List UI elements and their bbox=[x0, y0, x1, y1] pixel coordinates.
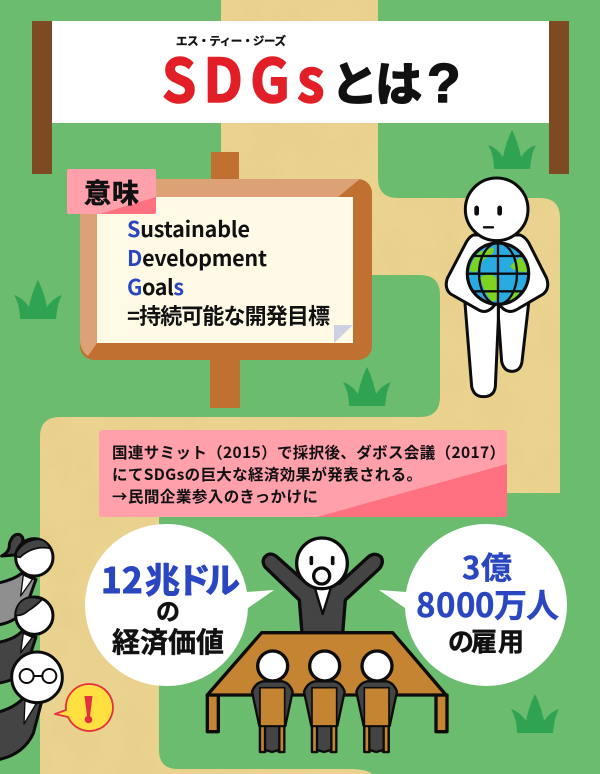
glasses man head bbox=[12, 652, 62, 703]
glasses right lens bbox=[42, 669, 56, 683]
line: Sustainable: Sustainable bbox=[127, 213, 250, 244]
tag text: 意味 bbox=[84, 172, 139, 211]
speech bubble: 12 trillion dollars bbox=[85, 524, 274, 686]
sign board dark frame bbox=[80, 179, 372, 360]
eye right bbox=[327, 558, 338, 563]
value line 2: 8000万人 bbox=[416, 579, 559, 627]
sign text bbox=[127, 213, 330, 331]
man head bbox=[15, 597, 53, 634]
の雇用 text: の雇用 bbox=[448, 622, 524, 659]
exclamation bar bbox=[84, 696, 92, 716]
tag darker corner bbox=[100, 197, 156, 214]
value line 1: 3億 bbox=[462, 543, 512, 588]
man body bbox=[0, 632, 36, 683]
icon: grass tuft top right bbox=[488, 130, 536, 169]
chair leg right bbox=[384, 726, 389, 752]
経済価値 text: 経済価値 bbox=[112, 621, 224, 661]
glasses bridge bbox=[34, 673, 42, 679]
mouth bbox=[484, 224, 493, 231]
woman body bbox=[0, 573, 36, 625]
chair legs and trousers bbox=[364, 726, 389, 752]
head circle bbox=[12, 652, 62, 703]
equator bbox=[468, 270, 528, 277]
bubble shape bbox=[85, 524, 274, 686]
banner cloth bbox=[52, 21, 549, 123]
callout line 3: →民間企業参入のきっかけに bbox=[112, 485, 318, 507]
meridian ellipse bbox=[479, 243, 517, 304]
woman head bbox=[16, 539, 53, 576]
icon: grass tuft centre bbox=[343, 367, 391, 406]
speaker body with raised arms bbox=[263, 554, 382, 633]
hair bbox=[15, 597, 42, 615]
glasses man shirt bbox=[24, 700, 36, 724]
chair back bbox=[312, 688, 337, 726]
woman shirt bbox=[21, 575, 32, 596]
woman ponytail bbox=[2, 534, 23, 556]
eye left bbox=[306, 558, 317, 563]
title: question mark: ? bbox=[427, 52, 461, 114]
note paper folded corner bbox=[334, 325, 353, 343]
torso bbox=[304, 681, 345, 726]
sign post top bbox=[211, 152, 239, 180]
south parallel bbox=[473, 288, 523, 295]
callout darker corner bbox=[317, 464, 507, 517]
line: Development: Development bbox=[127, 242, 267, 273]
head bbox=[258, 651, 288, 681]
banner left post bbox=[32, 21, 52, 174]
head bbox=[310, 651, 340, 681]
outline bbox=[467, 243, 529, 304]
line: Goals: Goals bbox=[127, 271, 184, 302]
signboard panel: meaning bbox=[67, 152, 372, 408]
chair back bbox=[364, 688, 389, 726]
icon: grass tuft left bbox=[14, 280, 62, 319]
head bbox=[362, 651, 392, 681]
speaker and audience at table bbox=[207, 538, 447, 752]
callout background bbox=[99, 430, 507, 517]
の text: の bbox=[156, 592, 180, 627]
hair bbox=[16, 539, 50, 557]
bubble shape bbox=[379, 524, 567, 686]
heading tag: 意味 bbox=[67, 169, 156, 214]
ocean bbox=[467, 243, 529, 304]
glasses left lens bbox=[20, 669, 34, 683]
torso bbox=[252, 681, 293, 726]
title text bbox=[162, 32, 461, 120]
title: SDGs: SDGs bbox=[162, 32, 324, 120]
torso bbox=[356, 681, 397, 726]
speech bubble: 380 million jobs bbox=[379, 524, 567, 686]
head circle bbox=[16, 597, 53, 634]
audience member 3 bbox=[356, 651, 397, 752]
bubble bbox=[55, 684, 113, 731]
banner right post bbox=[549, 21, 569, 174]
head circle bbox=[16, 539, 53, 576]
icon: globe bbox=[467, 243, 529, 304]
eye left bbox=[470, 208, 484, 213]
chair back bbox=[260, 688, 285, 726]
audience member 1 bbox=[252, 651, 293, 752]
land bbox=[469, 247, 527, 302]
eye right bbox=[493, 208, 507, 213]
chair leg left bbox=[312, 726, 317, 752]
north parallel bbox=[473, 252, 523, 259]
callout: UN summit note bbox=[99, 430, 507, 517]
chair leg left bbox=[260, 726, 265, 752]
glasses man body bbox=[0, 698, 42, 760]
open mouth bbox=[314, 568, 330, 584]
table leg right bbox=[436, 695, 447, 732]
line: definition: =持続可能な開発目標 bbox=[127, 299, 330, 331]
audience member 2 bbox=[304, 651, 345, 752]
furigana: エス・ティー・ジーズ bbox=[176, 33, 286, 49]
chair legs and trousers bbox=[260, 726, 284, 752]
chair leg left bbox=[364, 726, 369, 752]
arms and torso bbox=[446, 235, 548, 312]
chair leg right bbox=[279, 726, 284, 752]
callout line 1: 国連サミット（2015）で採択後、ダボス会議（2017） bbox=[112, 441, 505, 463]
character holding the globe bbox=[446, 178, 548, 397]
speaker shirt bbox=[315, 588, 331, 614]
chair legs and trousers bbox=[312, 726, 336, 752]
table top bbox=[207, 633, 446, 695]
speaker head bbox=[297, 538, 347, 589]
callout line 2: にてSDGsの巨大な経済効果が発表される。 bbox=[112, 463, 422, 485]
central meridian bbox=[494, 243, 501, 304]
head bbox=[465, 178, 528, 241]
sign post bottom bbox=[210, 358, 240, 408]
head circle bbox=[465, 178, 528, 241]
title: とは: とは bbox=[331, 46, 422, 115]
back leg bbox=[498, 303, 529, 371]
meridians and parallels bbox=[467, 243, 529, 304]
tag background bbox=[67, 169, 156, 214]
note paper bbox=[97, 197, 353, 343]
value text: 12兆ドル bbox=[101, 553, 240, 604]
man shirt bbox=[21, 633, 32, 653]
chair leg right bbox=[331, 726, 336, 752]
table leg left bbox=[207, 695, 218, 732]
icon: exclamation speech bubble bbox=[55, 684, 113, 731]
sign board light bevel bbox=[80, 179, 360, 356]
group of three people at left edge bbox=[0, 534, 62, 760]
front leg bbox=[465, 303, 498, 397]
head circle bbox=[297, 538, 347, 589]
icon: grass tuft bottom right bbox=[511, 694, 559, 733]
title banner bbox=[32, 21, 569, 174]
exclamation dot bbox=[85, 716, 92, 723]
